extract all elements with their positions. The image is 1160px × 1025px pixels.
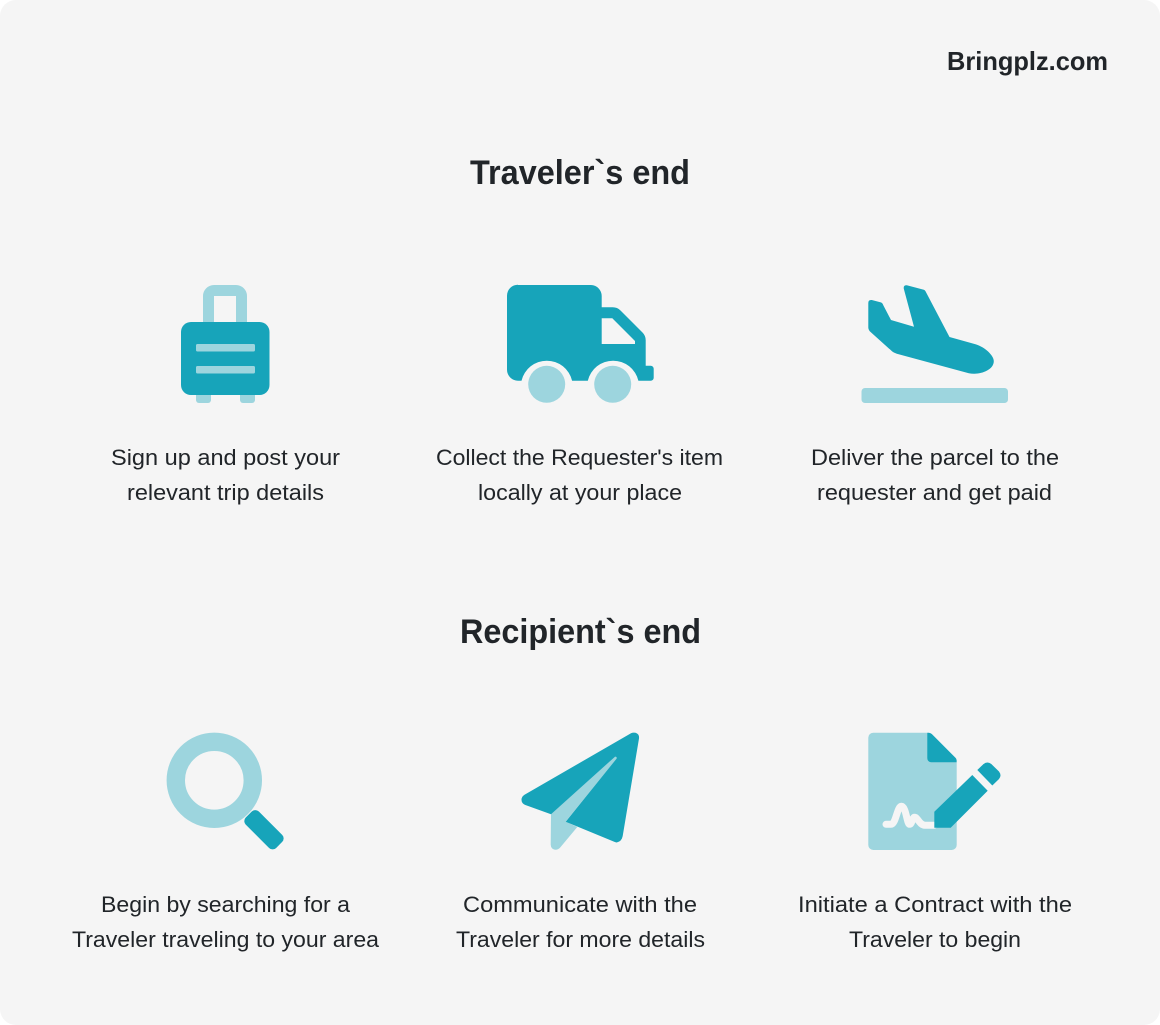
icon: signed contract	[868, 733, 1000, 850]
heading: Traveler's end: Traveler`s end	[470, 154, 690, 192]
text: step sign up: relevant trip details	[127, 480, 324, 505]
text: step search	[72, 892, 380, 952]
text: step communicate: Traveler for more details	[456, 927, 705, 952]
text: step collect	[436, 445, 723, 505]
text: step contract	[798, 892, 1072, 952]
icon: truck	[507, 285, 654, 403]
text: step deliver: requester and get paid	[817, 480, 1052, 505]
text: step collect: Collect the Requester's item	[436, 445, 723, 470]
text: step sign up: Sign up and post your	[111, 445, 340, 470]
heading: Recipient's end: Recipient`s end	[460, 613, 701, 651]
icon: landing plane	[862, 285, 1008, 403]
text: step deliver	[811, 445, 1059, 505]
text: step contract: Initiate a Contract with the	[798, 892, 1072, 917]
text: step communicate	[456, 892, 705, 952]
icon: magnifier	[176, 742, 286, 851]
text: step search: Traveler traveling to your area	[72, 927, 380, 952]
text: step contract: Traveler to begin	[849, 927, 1021, 952]
icon: suitcase	[181, 285, 270, 403]
text: step search: Begin by searching for a	[101, 892, 351, 917]
text: step sign up	[111, 445, 340, 505]
text: step deliver: Deliver the parcel to the	[811, 445, 1059, 470]
text: step communicate: Communicate with the	[463, 892, 697, 917]
brand name: Bringplz.com	[947, 46, 1108, 76]
text: step collect: locally at your place	[478, 480, 682, 505]
icon: paper plane	[522, 733, 639, 850]
